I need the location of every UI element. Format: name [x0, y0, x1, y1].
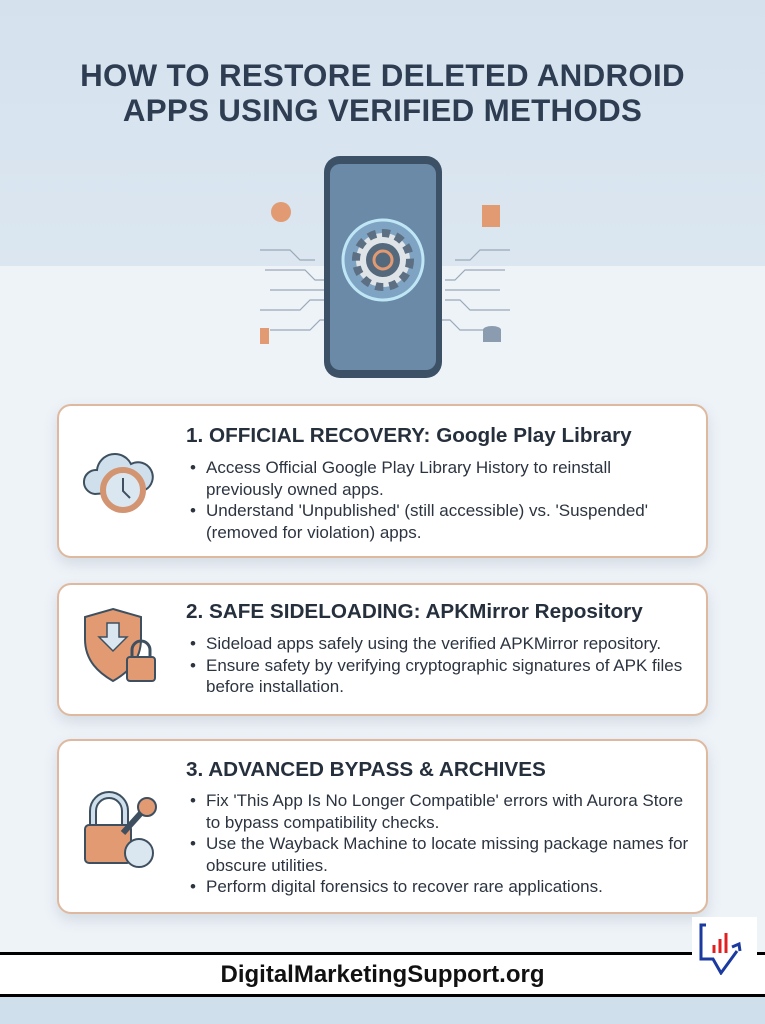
card 2: Sideload apps safely using the verified APKMirror repository.: [206, 634, 661, 653]
logo: [692, 917, 757, 975]
card 3: Fix 'This App Is No Longer Compatible' errors with Aurora Store: [206, 791, 683, 810]
card 3: obscure utilities.: [206, 856, 328, 874]
card 1: (removed for violation) apps.: [206, 522, 421, 542]
icon: cloud with clock: [82, 453, 154, 513]
title: HOW TO RESTORE DELETED ANDROID: [80, 58, 685, 93]
card 3: 3. ADVANCED BYPASS & ARCHIVES: [186, 758, 546, 781]
icon: shield with lock: [84, 608, 156, 682]
illustration: phone with gear: [260, 156, 510, 378]
card 1: Understand 'Unpublished' (still accessible) vs. 'Suspended': [206, 501, 648, 520]
card 3: Perform digital forensics to recover rare applications.: [206, 877, 603, 896]
card 3: [57, 739, 708, 914]
card 1: Access Official Google Play Library History to reinstall: [206, 458, 611, 477]
footer: DigitalMarketingSupport.org: [220, 961, 544, 988]
icon: padlock with key and clock: [84, 791, 157, 868]
card 1: 1. OFFICIAL RECOVERY: Google Play Library: [186, 424, 632, 447]
card 2: before installation.: [206, 677, 344, 696]
title: APPS USING VERIFIED METHODS: [123, 93, 642, 128]
card 3: to bypass compatibility checks.: [206, 812, 439, 832]
card 2: 2. SAFE SIDELOADING: APKMirror Repository: [186, 600, 643, 623]
card 3: Use the Wayback Machine to locate missing package names for: [206, 834, 688, 853]
title: [80, 58, 685, 128]
card 1: [57, 404, 708, 558]
card 2: [57, 583, 708, 716]
card 2: Ensure safety by verifying cryptographic signatures of APK files: [206, 656, 682, 674]
footer: [0, 952, 765, 997]
card 1: previously owned apps.: [206, 480, 384, 498]
